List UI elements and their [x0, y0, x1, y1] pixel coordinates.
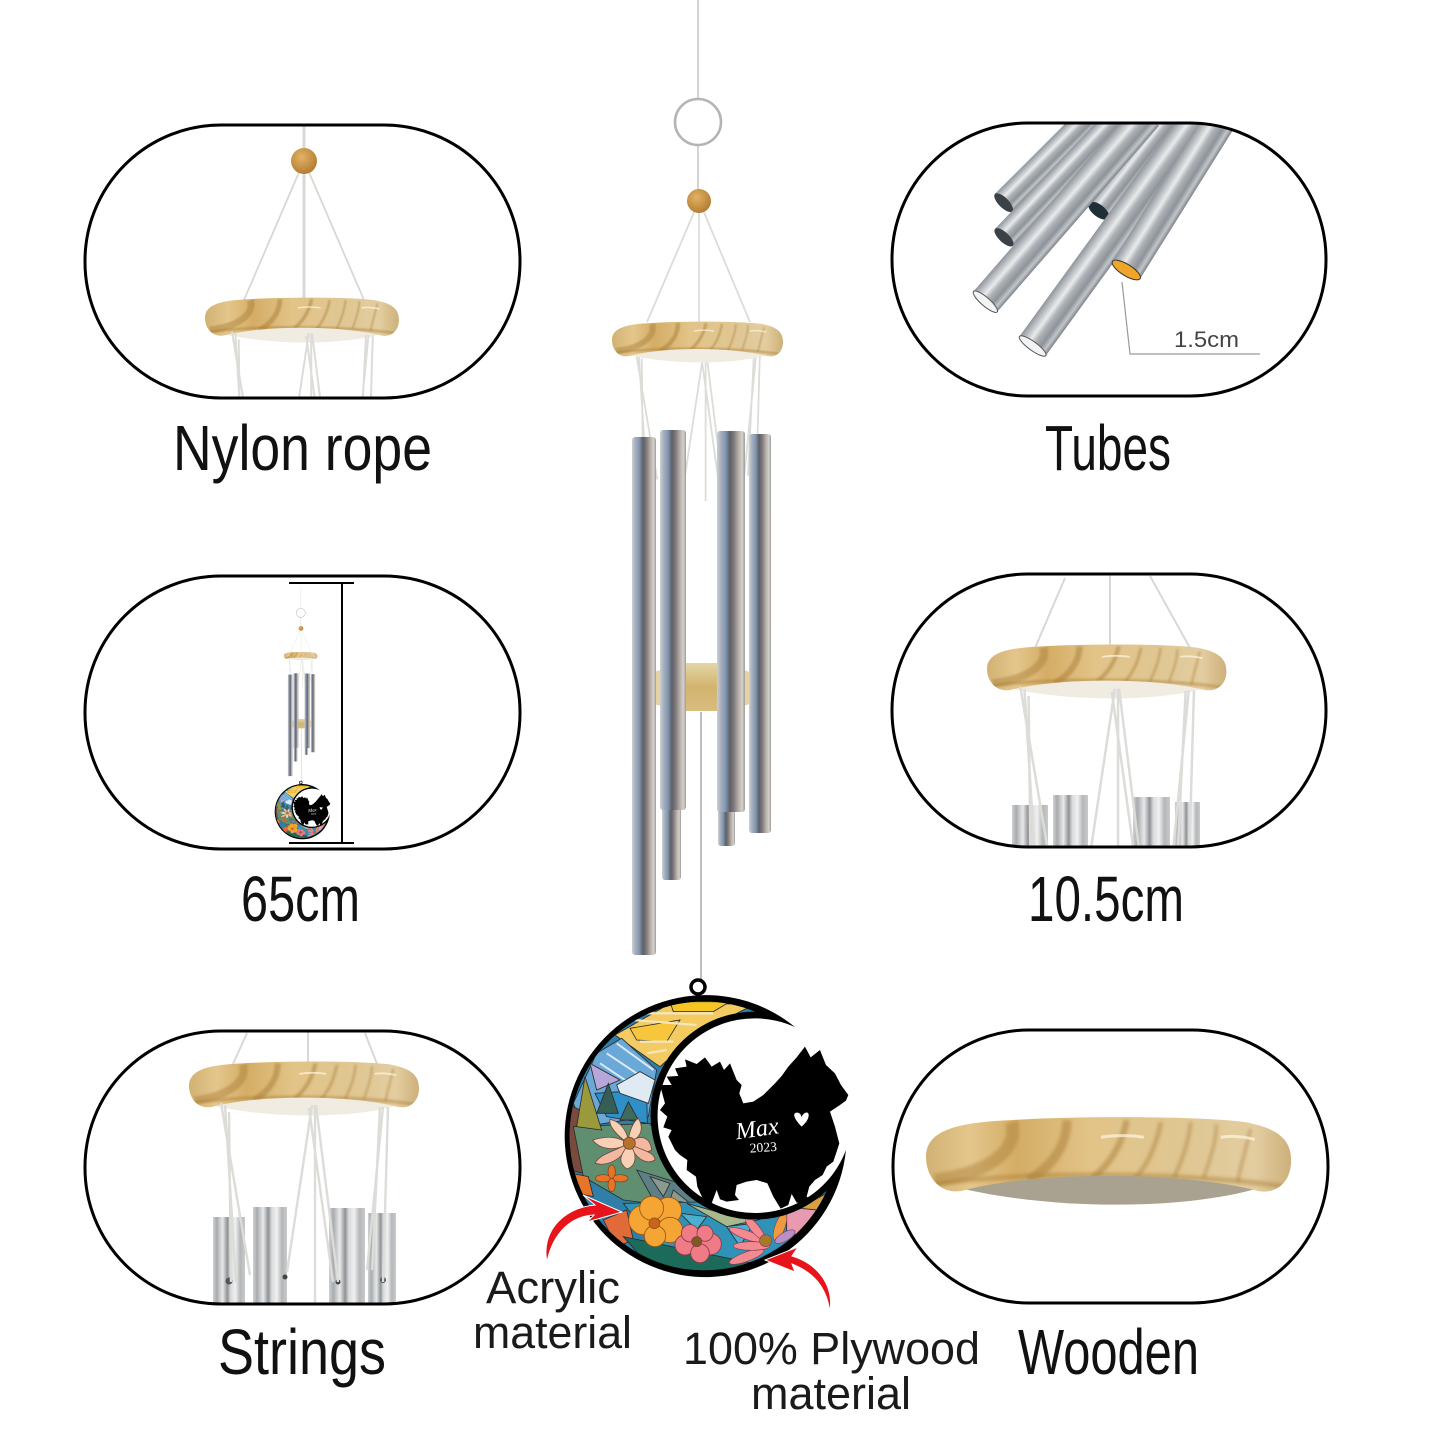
strings	[1019, 686, 1196, 846]
arrow: plywood pointer	[765, 1247, 831, 1312]
flower: small orange	[595, 1165, 628, 1192]
strings	[221, 1103, 388, 1304]
panel: wooden disc close-up	[893, 1030, 1328, 1303]
dog silhouette	[660, 1047, 848, 1209]
label: acrylic material: Acrylic	[486, 1262, 620, 1313]
nylon ropes	[244, 125, 364, 300]
tube 4	[749, 434, 771, 833]
icon: wooden bead	[291, 148, 317, 174]
label: plywood material: material	[751, 1368, 911, 1419]
caption: strings: Strings	[218, 1316, 386, 1388]
panel: nylon rope close-up	[84, 124, 522, 400]
arrow: acrylic pointer	[546, 1195, 622, 1262]
main wind chime	[612, 0, 783, 985]
tube 2	[660, 430, 686, 880]
side ropes	[647, 210, 750, 322]
metal ring	[675, 99, 721, 145]
panel: strings close-up	[85, 1031, 520, 1307]
label: acrylic material: material	[473, 1307, 632, 1358]
caption: tubes: Tubes	[1045, 412, 1171, 484]
stained glass crescent	[557, 990, 857, 1283]
year: 2023	[749, 1139, 778, 1156]
hanging rope	[697, 0, 699, 190]
panel: total length 65cm	[85, 576, 520, 849]
tube tops	[213, 1207, 396, 1307]
wooden disc	[926, 1117, 1291, 1205]
label: acrylic material	[473, 1262, 632, 1358]
moon suncatcher ornament	[557, 980, 857, 1283]
heart	[794, 1113, 809, 1127]
tube tops	[1012, 795, 1200, 850]
dimension label: 1.5cm	[1174, 327, 1239, 352]
caption: 65cm: 65cm	[241, 863, 360, 935]
miniature chime	[273, 589, 332, 841]
crescent black backing	[565, 995, 846, 1277]
wooden disc	[205, 298, 399, 343]
wooden bead	[687, 189, 711, 213]
panel: tubes close-up	[892, 100, 1326, 396]
tube 3	[717, 431, 745, 846]
top ropes	[1035, 574, 1190, 650]
aluminium tubes	[972, 124, 1232, 357]
flower: pink	[675, 1225, 721, 1263]
flower: peach lily	[593, 1118, 655, 1169]
label: plywood material: 100% Plywood	[683, 1323, 980, 1374]
caption: wooden: Wooden	[1018, 1316, 1199, 1388]
lower strings	[231, 332, 374, 396]
centre wooden striker	[648, 663, 756, 711]
wooden disc	[189, 1061, 419, 1115]
top ropes	[233, 1031, 377, 1064]
top wooden disc	[612, 322, 783, 362]
wooden disc	[987, 644, 1226, 698]
height measure line	[289, 583, 354, 843]
flower: large orange	[629, 1196, 683, 1247]
tube 1	[632, 437, 656, 955]
dimension leader line	[1122, 282, 1260, 354]
flower: spiky pink	[728, 1211, 797, 1267]
pet name: Max	[733, 1113, 781, 1145]
caption: nylon rope: Nylon rope	[173, 412, 432, 484]
caption: 10.5cm: 10.5cm	[1028, 863, 1184, 935]
panel: disc diameter 10.5cm	[890, 572, 1328, 848]
hook	[691, 980, 705, 994]
centre rope	[700, 712, 702, 985]
label: plywood material	[683, 1323, 980, 1419]
strings	[636, 352, 760, 501]
